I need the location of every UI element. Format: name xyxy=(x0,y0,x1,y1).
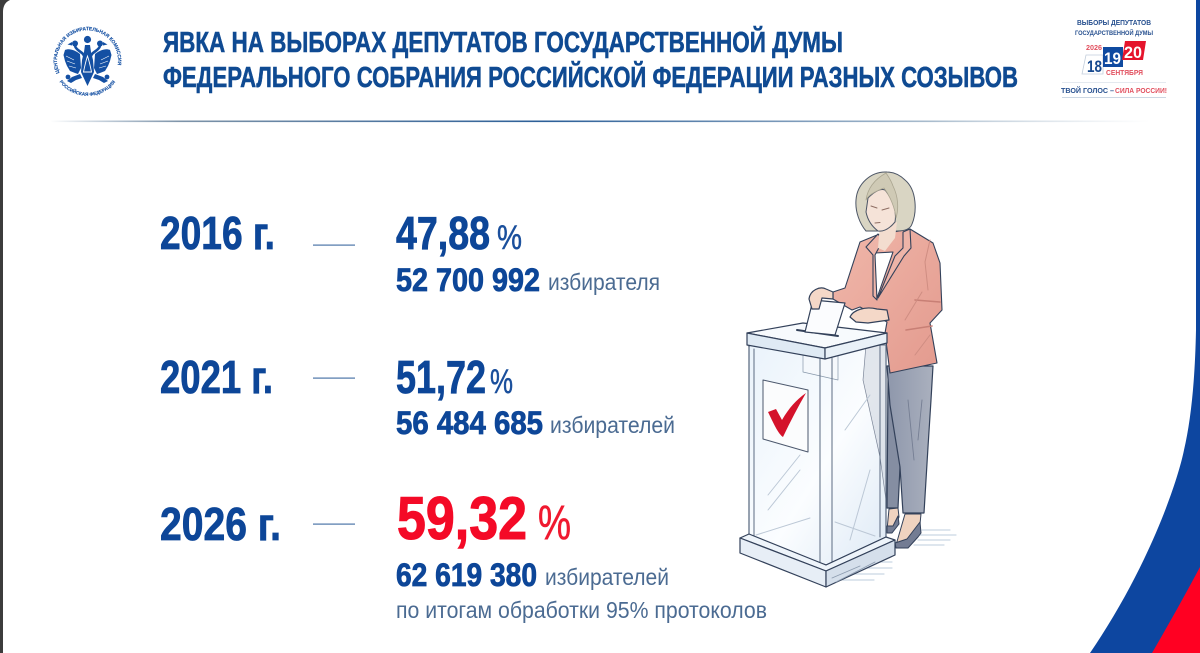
campaign logo: 20 xyxy=(1124,43,1142,62)
campaign logo: 2026 xyxy=(1086,43,1102,52)
campaign logo: 18 xyxy=(1087,57,1102,76)
emblem: election commission seal: ЦЕНТРАЛЬНАЯ ИЗБИРАТЕЛЬНАЯ КОМИССИЯ xyxy=(54,26,122,74)
row: 2026: % xyxy=(538,497,571,550)
flag band: blue xyxy=(1090,0,1200,653)
icon: double-headed eagle xyxy=(64,36,112,86)
shoes xyxy=(887,508,921,548)
campaign logo: ВЫБОРЫ ДЕПУТАТОВ xyxy=(1077,18,1151,27)
campaign logo: 19 xyxy=(1104,49,1121,68)
campaign logo: ТВОЙ ГОЛОС – xyxy=(1061,86,1114,95)
row: 2026: по итогам обработки 95% протоколов xyxy=(396,597,767,623)
shoe shadows xyxy=(830,530,956,580)
row: 2021: 2021 г. xyxy=(160,351,273,403)
campaign logo: СЕНТЯБРЯ xyxy=(1106,70,1143,77)
row: 2021: 51,72 xyxy=(396,351,486,403)
row: 2016: избирателя xyxy=(548,269,660,295)
row: 2016: % xyxy=(497,219,522,257)
row: 2021: избирателей xyxy=(550,412,675,438)
campaign logo: СИЛА РОССИИ! xyxy=(1115,86,1167,95)
neck and head xyxy=(856,172,915,251)
row: 2021 xyxy=(160,351,675,441)
row: 2016: 2016 г. xyxy=(160,207,275,259)
ballot paper and hands xyxy=(805,288,889,335)
campaign logo: ГОСУДАРСТВЕННОЙ ДУМЫ xyxy=(1075,28,1153,37)
flag band: red xyxy=(1152,567,1200,653)
row: 2021: 56 484 685 xyxy=(396,405,543,441)
row: 2016: 47,88 xyxy=(396,207,490,259)
row: 2026: 2026 г. xyxy=(160,498,281,550)
trousers xyxy=(887,366,933,513)
row: 2016 xyxy=(160,207,660,298)
campaign logo xyxy=(1061,18,1167,98)
ballot box base xyxy=(740,534,895,587)
title: ЯВКА НА ВЫБОРАХ ДЕПУТАТОВ ГОСУДАРСТВЕННОЙ ДУМЫ xyxy=(163,25,843,59)
row: 2026 xyxy=(160,485,767,623)
title xyxy=(163,25,1018,94)
illustration: woman voting at ballot box xyxy=(740,172,956,587)
row: 2026: 62 619 380 xyxy=(396,557,537,593)
emblem: election commission seal xyxy=(54,26,122,96)
row: 2021: % xyxy=(490,363,513,401)
blazer xyxy=(833,229,942,373)
emblem: election commission seal: РОССИЙСКАЯ ФЕДЕРАЦИЯ xyxy=(60,80,116,96)
left screen edge xyxy=(0,0,10,653)
poster with check mark xyxy=(763,380,808,452)
ballot box back and lid xyxy=(747,323,887,565)
row: 2026: 59,32 xyxy=(397,485,527,552)
row: 2016: 52 700 992 xyxy=(396,262,540,298)
row: 2026: избирателей xyxy=(545,564,669,590)
